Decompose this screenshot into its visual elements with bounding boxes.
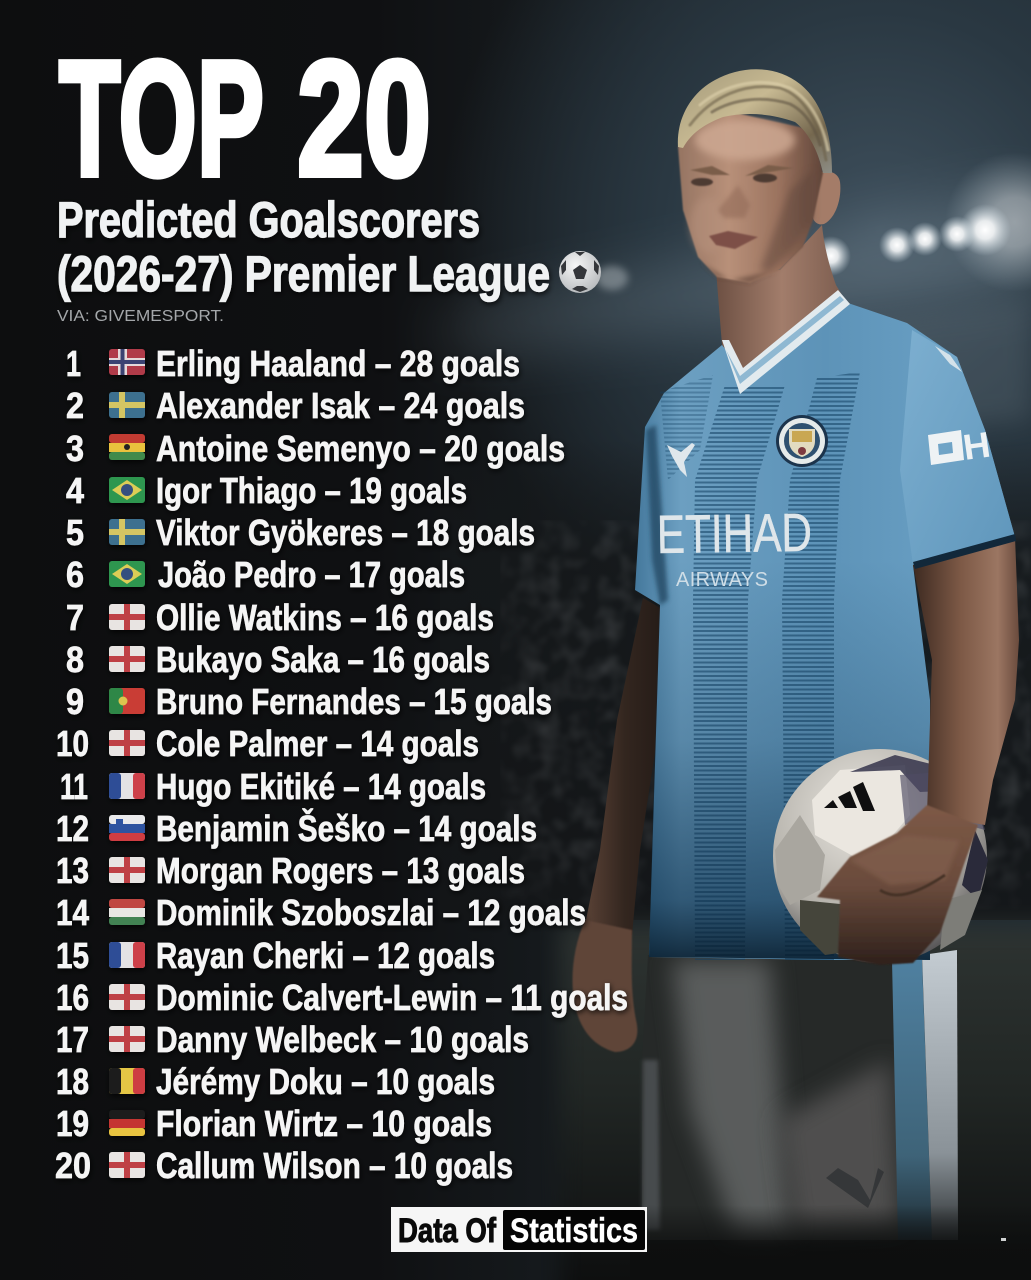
flag: France — [109, 942, 145, 968]
flag: Brazil — [109, 477, 145, 503]
jersey ribbed stripes — [660, 372, 860, 960]
row 1: Erling Haaland – 28 goals — [156, 343, 520, 384]
row 14: Dominik Szoboszlai – 12 goals — [156, 892, 586, 933]
row 13: 13 — [56, 850, 89, 891]
row 18 — [56, 1061, 495, 1102]
sleeve sponsor — [928, 424, 993, 468]
row 1 — [66, 343, 520, 384]
row 5: Viktor Gyökeres – 18 goals — [156, 512, 535, 553]
left hand — [572, 920, 637, 1052]
jersey lower shading — [649, 560, 930, 960]
flag: Sweden — [109, 519, 145, 545]
flag: Slovenia — [109, 815, 145, 841]
row 15: Rayan Cherki – 12 goals — [156, 935, 495, 976]
row 12: 12 — [56, 808, 89, 849]
puma mark on sleeve — [935, 346, 962, 372]
sleeve hem — [913, 534, 1016, 569]
title: TOP — [59, 27, 264, 210]
row 11 — [60, 766, 486, 807]
row 7: Ollie Watkins – 16 goals — [156, 597, 494, 638]
row 4: 4 — [66, 470, 84, 511]
flag: England — [109, 730, 145, 756]
puma logo — [667, 443, 695, 477]
sleeve sponsor: H — [960, 424, 993, 468]
mouth — [709, 231, 758, 249]
row 4 — [66, 470, 467, 511]
row 6 — [66, 554, 465, 595]
row 9: Bruno Fernandes – 15 goals — [156, 681, 552, 722]
row 19: Florian Wirtz – 10 goals — [156, 1103, 492, 1144]
row 8 — [66, 639, 490, 680]
ear — [811, 171, 840, 224]
flag: Hungary — [109, 899, 145, 925]
right arm — [913, 537, 1019, 825]
subtitle: Predicted Goalscorers — [57, 192, 480, 248]
player illustration — [572, 69, 1031, 1280]
sponsor lettering: ETIHAD — [657, 503, 812, 565]
sponsor lettering — [657, 503, 812, 591]
row 2: Alexander Isak – 24 goals — [156, 385, 525, 426]
brand badge: Data Of Statistics — [391, 1207, 647, 1252]
subtitle: (2026-27) Premier League — [57, 246, 550, 302]
shorts lower fade — [630, 1205, 1031, 1280]
row 6: João Pedro – 17 goals — [158, 554, 465, 595]
row 9: 9 — [66, 681, 84, 722]
subtitle — [57, 192, 550, 302]
nose — [718, 185, 750, 218]
row 2: 2 — [66, 385, 84, 426]
source credit: VIA: GIVEMESPORT. — [57, 308, 224, 325]
face — [678, 110, 823, 283]
stadium floodlights — [811, 152, 1031, 292]
tiny lens mark — [1001, 1238, 1006, 1241]
flag: England — [109, 1026, 145, 1052]
flag: England — [109, 857, 145, 883]
row 20 — [55, 1145, 513, 1186]
flag: Portugal — [109, 688, 145, 714]
jersey torso — [635, 303, 1015, 960]
title: 20 — [297, 27, 431, 210]
neck — [716, 225, 848, 374]
v-neck collar — [722, 290, 850, 394]
row 19: 19 — [56, 1103, 89, 1144]
row 5: 5 — [66, 512, 84, 553]
flag: Germany — [109, 1110, 145, 1136]
row 8: 8 — [66, 639, 84, 680]
row 10: 10 — [56, 723, 89, 764]
ranking list — [55, 343, 628, 1186]
flag: Belgium — [109, 1068, 145, 1094]
row 13 — [56, 850, 525, 891]
left arm — [585, 598, 664, 935]
row 10: Cole Palmer – 14 goals — [156, 723, 479, 764]
row 17: 17 — [56, 1019, 89, 1060]
row 11: Hugo Ekitiké – 14 goals — [156, 766, 486, 807]
row 18: 18 — [56, 1061, 89, 1102]
row 16: Dominic Calvert-Lewin – 11 goals — [156, 977, 628, 1018]
row 4: Igor Thiago – 19 goals — [156, 470, 467, 511]
row 17 — [56, 1019, 529, 1060]
flag: England — [109, 604, 145, 630]
row 15 — [56, 935, 495, 976]
row 8: Bukayo Saka – 16 goals — [156, 639, 490, 680]
flag: Brazil — [109, 561, 145, 587]
ball logo stripes — [824, 782, 875, 811]
row 14: 14 — [56, 892, 89, 933]
row 5 — [66, 512, 535, 553]
right hand on ball — [817, 805, 978, 965]
row 10 — [56, 723, 479, 764]
row 12 — [56, 807, 537, 849]
row 7 — [66, 597, 494, 638]
shorts — [642, 950, 958, 1240]
row 12: Benjamin Šeško – 14 goals — [156, 807, 537, 849]
side fold shadow — [646, 425, 668, 605]
flag: England — [109, 1152, 145, 1178]
row 9 — [66, 681, 552, 722]
row 19 — [56, 1103, 492, 1144]
brand badge: Data Of Statistics: Statistics — [510, 1212, 638, 1250]
flag: Sweden — [109, 392, 145, 418]
row 14 — [56, 892, 586, 933]
row 11: 11 — [60, 766, 88, 807]
hair — [678, 69, 832, 173]
row 3: Antoine Semenyo – 20 goals — [156, 428, 565, 469]
row 17: Danny Welbeck – 10 goals — [156, 1019, 529, 1060]
row 20: 20 — [55, 1145, 91, 1186]
row 20: Callum Wilson – 10 goals — [156, 1145, 513, 1186]
row 6: 6 — [66, 554, 84, 595]
right sleeve — [900, 330, 1015, 565]
row 15: 15 — [56, 935, 89, 976]
row 7: 7 — [66, 597, 84, 638]
eyebrows and eyes — [690, 165, 794, 186]
row 2 — [66, 385, 525, 426]
row 18: Jérémy Doku – 10 goals — [156, 1061, 495, 1102]
flag: Norway — [109, 349, 145, 375]
icon: football emoji — [559, 251, 601, 293]
sponsor lettering: AIRWAYS — [676, 569, 768, 591]
flag: England — [109, 984, 145, 1010]
row 1: 1 — [66, 343, 81, 384]
brand badge: Data Of Statistics: Data Of — [398, 1212, 497, 1250]
row 3: 3 — [66, 428, 84, 469]
row 16: 16 — [56, 977, 89, 1018]
row 13: Morgan Rogers – 13 goals — [156, 850, 525, 891]
flag: France — [109, 773, 145, 799]
club crest — [776, 415, 828, 467]
stadium background — [422, 0, 1031, 1280]
flag: England — [109, 646, 145, 672]
flag: Ghana — [109, 434, 145, 460]
football — [773, 749, 988, 963]
